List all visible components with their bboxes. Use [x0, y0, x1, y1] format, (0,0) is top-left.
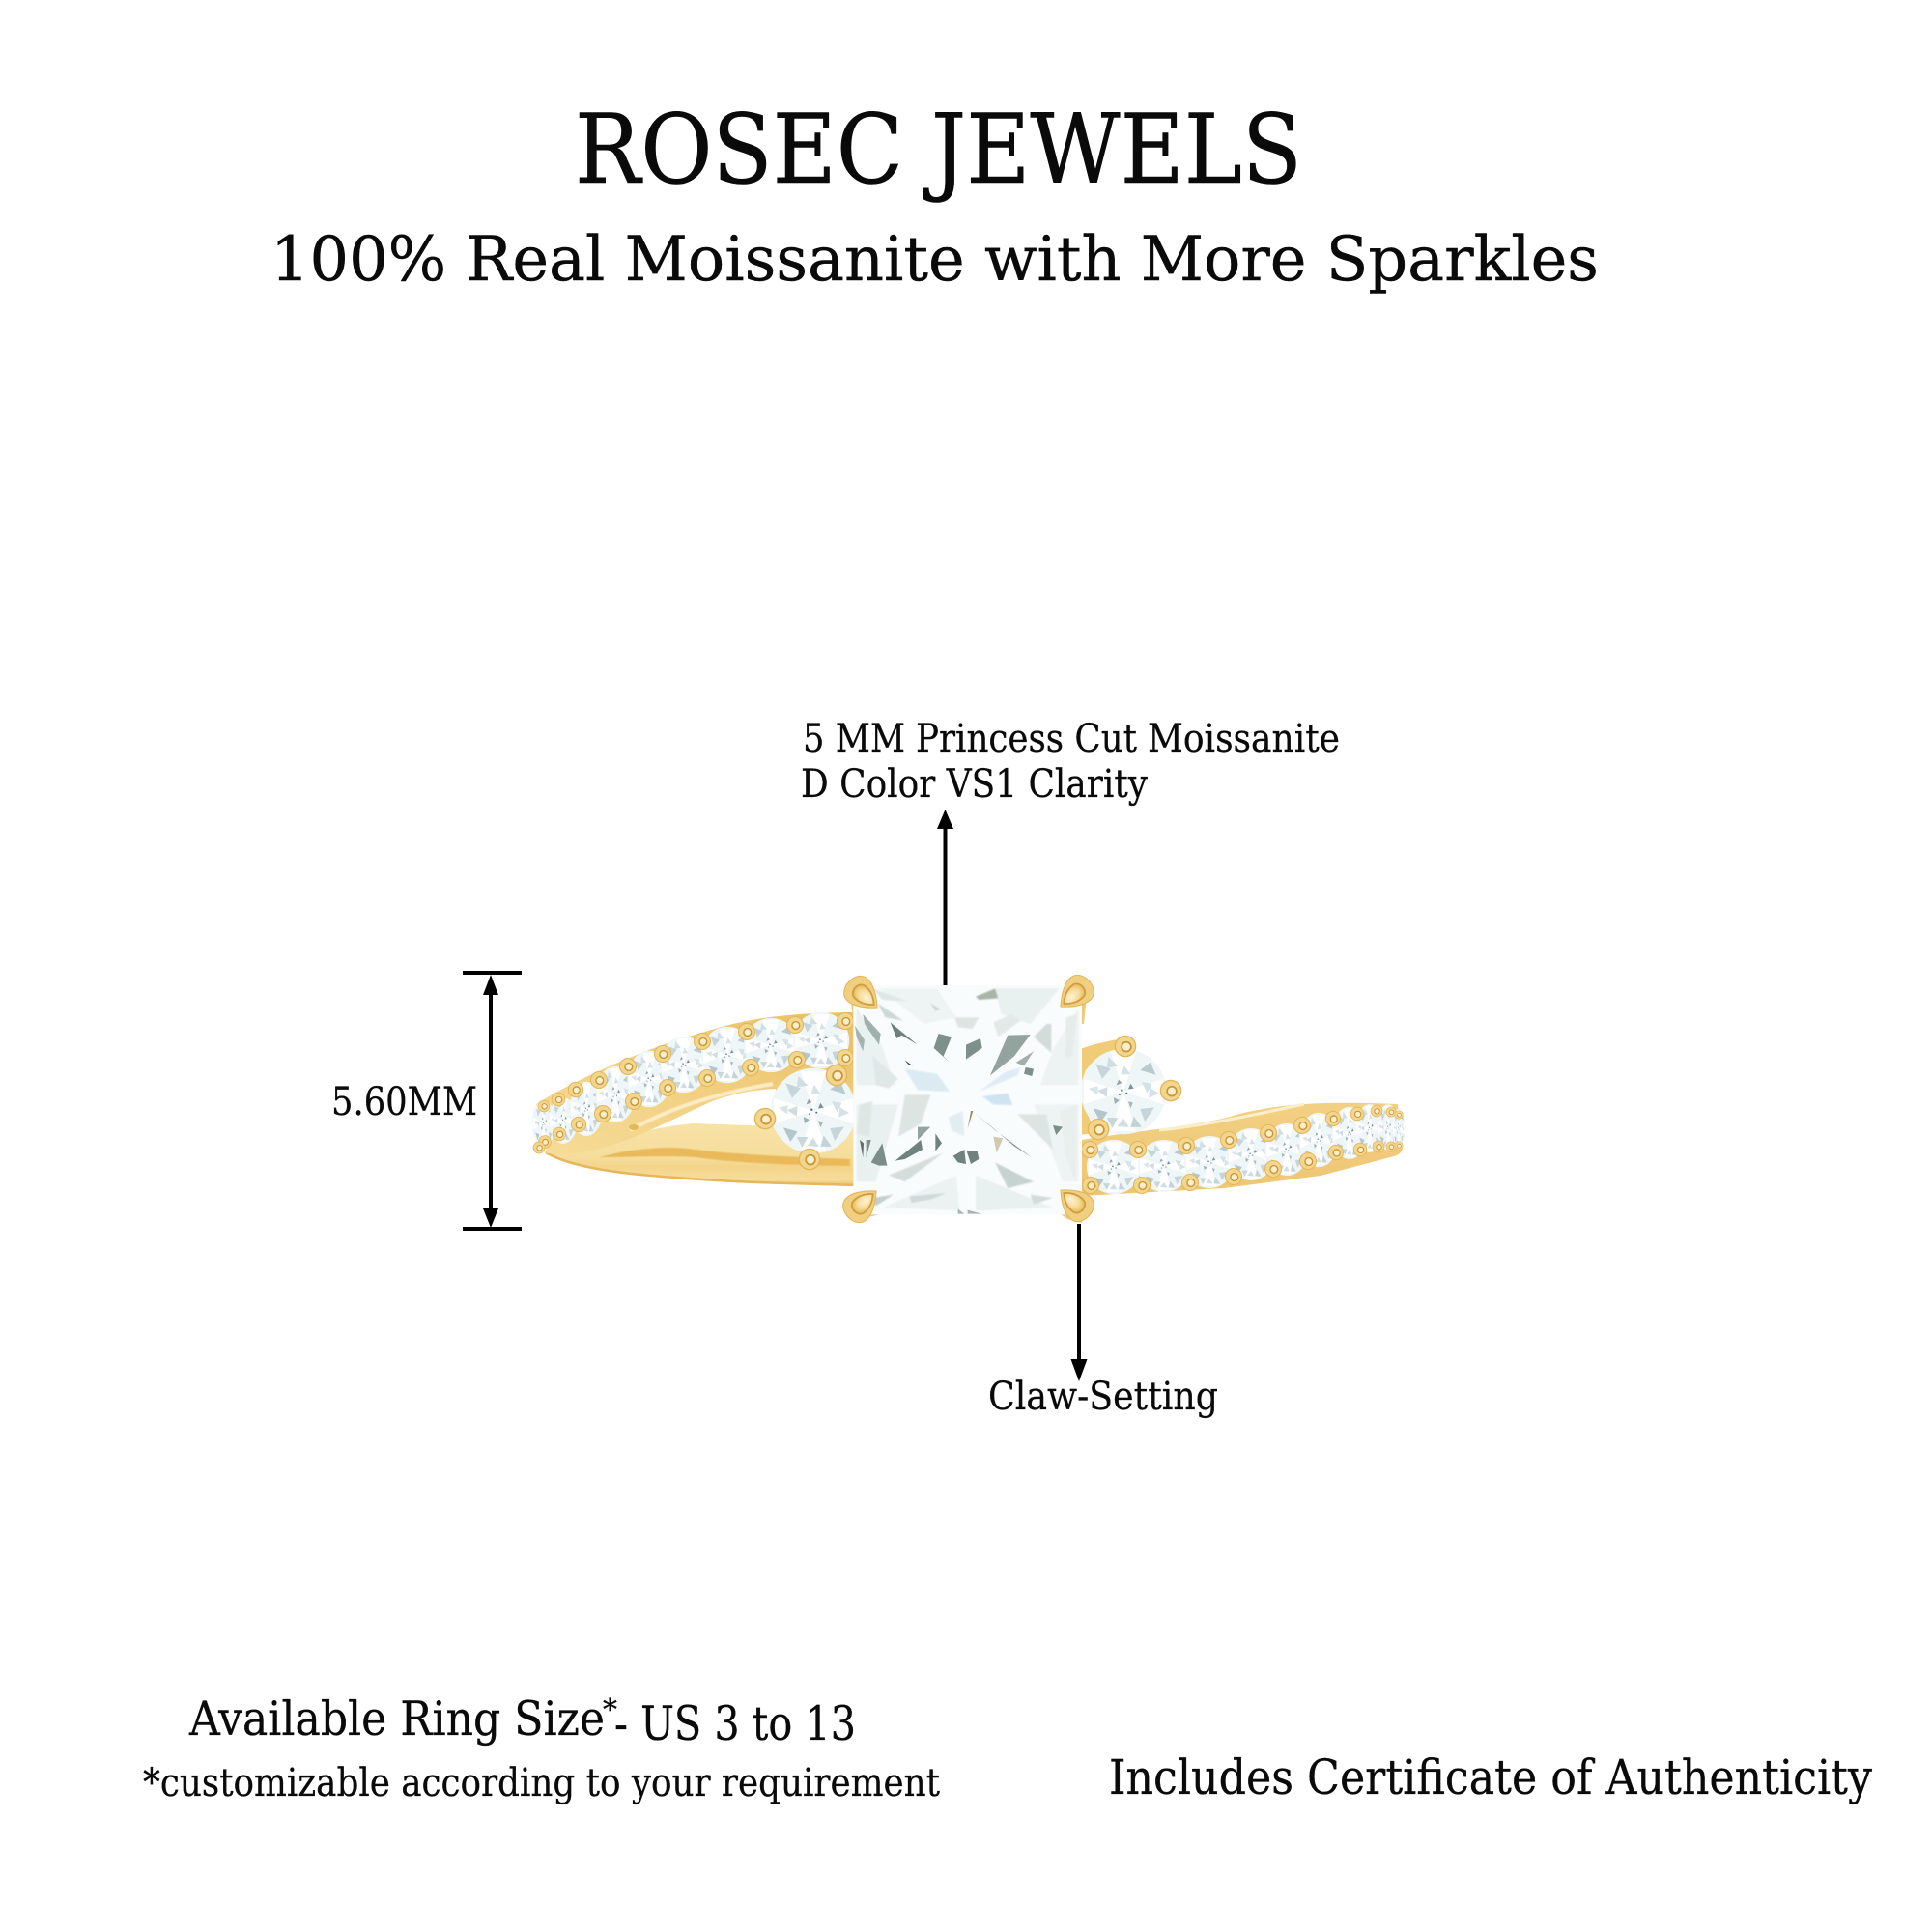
callout: center stone specification: D Color VS1 Clarity: [801, 762, 1148, 807]
subtitle: 100% Real Moissanite with More Sparkles: [270, 224, 1599, 296]
dimension label: 5.60MM: [331, 1080, 477, 1124]
ring right band: [1082, 1103, 1403, 1196]
side stone right: [1081, 1036, 1181, 1140]
pave stones left: [532, 1012, 849, 1147]
band inner streak: [599, 1148, 850, 1166]
arrow: claw setting: [1070, 1224, 1088, 1381]
ring upper strand left: [536, 1012, 860, 1154]
claw top right: [1051, 970, 1099, 1017]
strand slit bead: [629, 1124, 639, 1130]
claw bottom left: [838, 1180, 886, 1228]
side stone left: [754, 1065, 856, 1170]
band outer edge: [546, 1152, 860, 1185]
callout: center stone specification: 5 MM: [803, 717, 905, 761]
right side stone arc: [1080, 1038, 1127, 1135]
claw bottom right: [1051, 1179, 1099, 1227]
title: ROSEC JEWELS: [575, 95, 1302, 206]
pave prongs right: [1082, 1105, 1403, 1194]
ring lower band left: [544, 1123, 860, 1186]
right band slit: [1159, 1104, 1304, 1130]
ring size text: [188, 1691, 856, 1751]
customizable note: *customizable according to your requirement: [143, 1761, 940, 1805]
dimension arrow: height: [463, 971, 522, 1231]
ring: [532, 970, 1405, 1228]
callout: center stone specification: Princess Cut: [916, 717, 1137, 761]
ring size text: *: [603, 1693, 617, 1727]
pave prongs left: [533, 1012, 854, 1153]
claw top left: [838, 971, 887, 1018]
pave stones right: [1087, 1104, 1405, 1194]
callout: center stone specification: Moissanite: [1148, 717, 1340, 761]
ring size text: Available Ring Size: [188, 1691, 605, 1747]
ring size text: - US 3 to 13: [614, 1696, 856, 1751]
arrow: up to text: [937, 810, 953, 987]
label: claw setting: Claw-Setting: [988, 1375, 1218, 1419]
setting gold under stone corners: [850, 995, 1087, 1223]
callout: center stone specification: [801, 717, 1340, 807]
center princess cut stone: [853, 985, 1082, 1214]
strand highlight slit: [630, 1084, 773, 1130]
